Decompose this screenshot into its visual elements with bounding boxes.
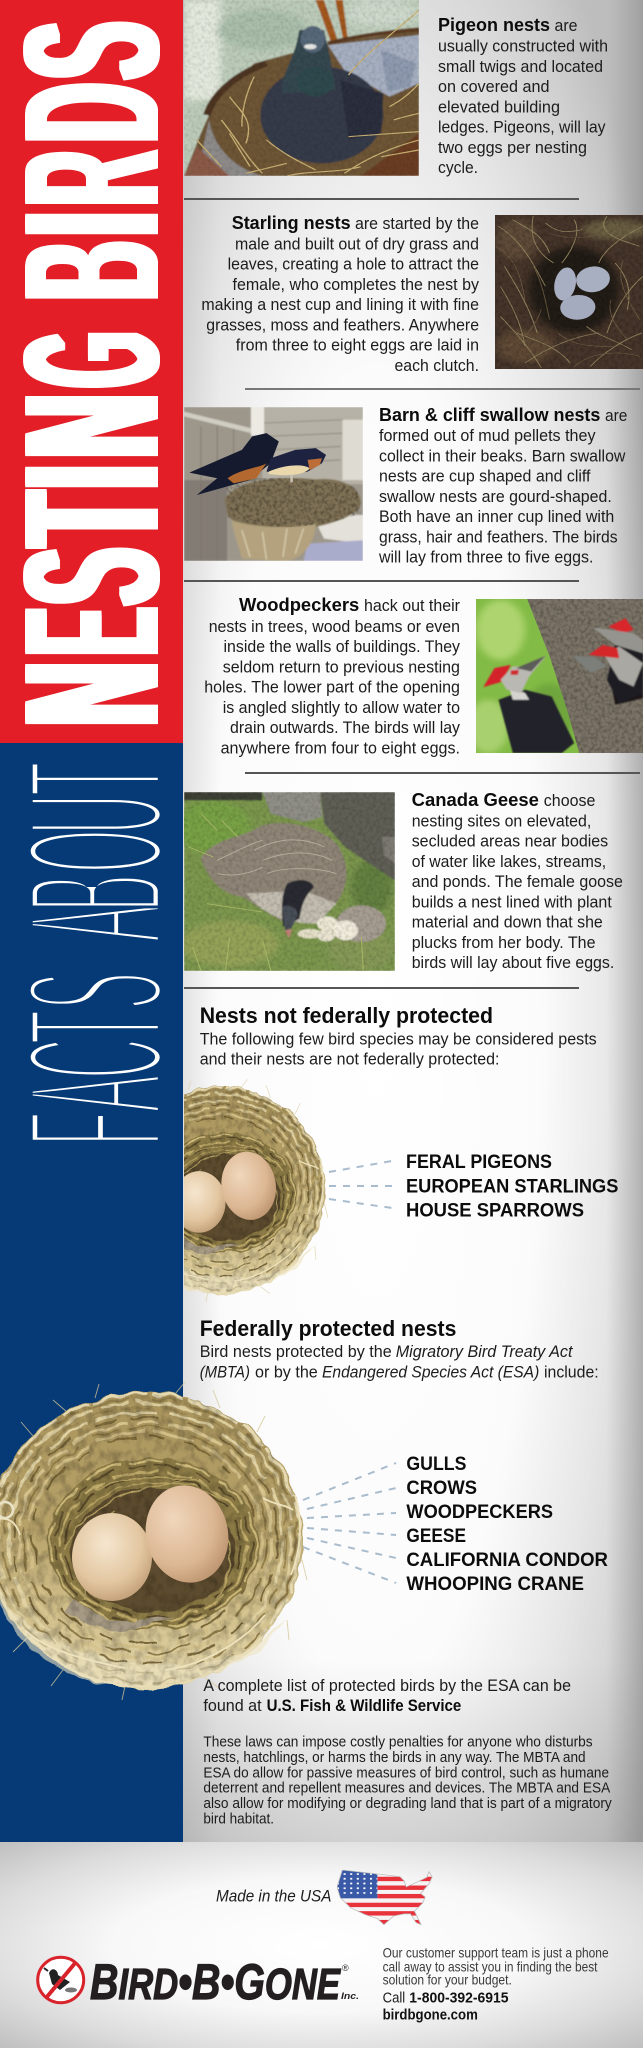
text block: woodpeckers: is angled slightly to allow water to — [223, 699, 460, 717]
text block: barn and cliff swallow nests: Both have an inner cup lined with — [379, 508, 614, 526]
illustration: small nest with two eggs — [184, 1079, 328, 1302]
text block: penalties paragraph: nests, hatchlings, or harms the birds in any way. The MBTA and — [203, 1750, 586, 1766]
text block: protected intro: or by the — [255, 1364, 318, 1382]
text block: pigeon nests: cycle. — [438, 159, 478, 177]
panel: red title band — [0, 0, 183, 743]
text block: pigeon nests: small twigs and located — [438, 58, 603, 76]
text: Made in the USA: Made in the USA — [216, 1887, 331, 1906]
list: unprotected species — [406, 1151, 618, 1222]
text block: pigeon nests: are — [554, 17, 578, 35]
list: protected species: GULLS — [406, 1453, 466, 1475]
text block: Canada geese: nesting sites on elevated, — [412, 812, 591, 830]
logo wordmark: BIRD•B•GONE — [90, 1954, 341, 2010]
registered mark: ® — [342, 1963, 349, 1973]
text block: pigeon nests — [438, 15, 608, 177]
text block: ESA list reference: A complete list of protected birds by the ESA can be — [203, 1677, 571, 1695]
text block: penalties paragraph: These laws can impose costly penalties for anyone who disturbs — [203, 1735, 593, 1751]
text block: pigeon nests: usually constructed with — [438, 38, 608, 56]
list: protected species: WOODPECKERS — [406, 1501, 553, 1523]
text block: pigeon nests: on covered and — [438, 78, 550, 96]
text block: pigeon nests: elevated building — [438, 98, 560, 116]
logo suffix: Inc. — [341, 1991, 359, 2001]
list: protected species: CALIFORNIA CONDOR — [406, 1549, 608, 1571]
text block: Canada geese: secluded areas near bodies — [412, 832, 608, 850]
text block: protected intro: Endangered Species Act (ESA) — [322, 1364, 539, 1382]
text block: barn and cliff swallow nests: will lay from three to five eggs. — [378, 548, 593, 566]
list: protected species: WHOOPING CRANE — [406, 1573, 584, 1595]
text block: barn and cliff swallow nests — [378, 405, 627, 566]
text block: Canada geese: plucks from her body. The — [412, 934, 596, 952]
text block: unprotected intro: The following few bird species may be considered pests — [200, 1030, 597, 1048]
dashed connectors: unprotected species — [329, 1161, 392, 1208]
text block: penalties paragraph: ESA do allow for passive measures of bird control, such as humane — [203, 1765, 609, 1781]
text block: woodpeckers: Woodpeckers — [239, 595, 359, 615]
text block: starling nests: Starling nests — [232, 213, 351, 233]
list: protected species: GEESE — [406, 1525, 466, 1547]
text block: starling nests: grasses, moss and feathers. Anywhere — [206, 316, 479, 334]
text block: customer support contact: call away to assist you in finding the best — [383, 1958, 598, 1974]
text block: barn and cliff swallow nests: formed out of mud pellets they — [379, 427, 596, 445]
text block: starling nests: each clutch. — [394, 357, 479, 375]
text block: Canada geese: birds will lay about five eggs. — [412, 954, 614, 972]
text block: starling nests: are started by the — [355, 215, 479, 233]
text block: barn and cliff swallow nests: nests are cup shaped and cliff — [379, 468, 591, 486]
list: unprotected species: EUROPEAN STARLINGS — [406, 1176, 618, 1198]
text block: Canada geese: choose — [544, 792, 595, 810]
text block: starling nests — [201, 213, 480, 375]
text block: pigeon nests: ledges. Pigeons, will lay — [438, 118, 606, 136]
text block: Canada geese: of water like lakes, streams, — [412, 853, 606, 871]
text block: starling nests: from three to eight eggs are laid in — [236, 336, 479, 354]
list: protected species — [406, 1453, 608, 1595]
text block: unprotected intro: and their nests are not federally protected: — [200, 1050, 499, 1068]
text block: Canada geese: builds a nest lined with plant — [412, 894, 612, 912]
text block: protected intro: include: — [544, 1364, 599, 1382]
text block: ESA list reference: found at — [203, 1697, 262, 1715]
text block: customer support contact: birdbgone.com — [383, 2006, 478, 2023]
text block: woodpeckers: drain outwards. The birds will lay — [230, 719, 461, 737]
list: unprotected species: HOUSE SPARROWS — [406, 1200, 584, 1222]
heading: federally protected nests: Federally protected nests — [200, 1316, 456, 1341]
text block: starling nests: male and built out of dry grass and — [235, 236, 479, 254]
text block: barn and cliff swallow nests: Barn & cliff swallow nests — [379, 405, 600, 425]
text block: woodpeckers — [204, 595, 461, 758]
text block: protected intro — [200, 1343, 599, 1382]
logo: Bird-B-Gone — [38, 1954, 359, 2010]
text block: starling nests: making a nest cup and lining it with fine — [201, 296, 479, 314]
text block: customer support contact: 1-800-392-6915 — [409, 1990, 508, 2007]
photo: pileated woodpeckers at tree — [476, 599, 643, 753]
heading: NESTING BIRDS — [0, 22, 199, 730]
text block: woodpeckers: hack out their — [364, 597, 460, 615]
text block: protected intro: (MBTA) — [200, 1364, 250, 1382]
text block: woodpeckers: seldom return to previous nesting — [223, 658, 460, 676]
text block: pigeon nests: two eggs per nesting — [438, 139, 587, 157]
text block: Canada geese: and ponds. The female goose — [412, 873, 623, 891]
text block: starling nests: leaves, creating a hole to attract the — [228, 256, 479, 274]
photo: starling nest with eggs — [495, 215, 643, 369]
text block: barn and cliff swallow nests: swallow nests are gourd-shaped. — [379, 488, 612, 506]
text block: penalties paragraph: deterrent and repellent measures and devices. The MBTA and ESA — [203, 1781, 611, 1797]
list: unprotected species: FERAL PIGEONS — [406, 1151, 552, 1173]
text block: ESA list reference: U.S. Fish & Wildlife Service — [267, 1697, 461, 1715]
text block: customer support contact: Our customer support team is just a phone — [383, 1945, 609, 1961]
text block: woodpeckers: nests in trees, wood beams or even — [209, 618, 460, 636]
panel: blue title band — [0, 743, 183, 1842]
text block: customer support contact: solution for your budget. — [383, 1972, 512, 1988]
icon: no-bird symbol — [38, 1957, 84, 2003]
text block: woodpeckers: inside the walls of buildings. They — [224, 638, 461, 656]
photo: Canada goose on nest — [184, 792, 395, 971]
text block: penalties paragraph — [203, 1735, 613, 1827]
text block: protected intro: Migratory Bird Treaty Act — [396, 1343, 574, 1361]
photo: barn swallows at mud nest — [184, 407, 363, 561]
illustration: large nest with two eggs — [0, 1382, 307, 1700]
background: main panel — [183, 0, 643, 1842]
text block: penalties paragraph: also allow for modifying or degrading land that is part of a migratory — [203, 1796, 613, 1812]
text block: woodpeckers: anywhere from four to eight eggs. — [221, 740, 460, 758]
text block: Canada geese: material and down that she — [412, 914, 603, 932]
photo: pigeon on nest — [184, 0, 419, 176]
background: footer panel — [0, 1842, 643, 2048]
text block: customer support contact: Call — [383, 1990, 405, 2007]
text block: Canada geese: Canada Geese — [412, 790, 539, 810]
text block: barn and cliff swallow nests: are — [605, 407, 627, 425]
text block: barn and cliff swallow nests: grass, hair and feathers. The birds — [379, 528, 618, 546]
text block: Canada geese — [412, 790, 623, 972]
text block: protected intro: Bird nests protected by the — [200, 1343, 392, 1361]
text block: starling nests: female, who completes the nest by — [232, 276, 480, 294]
text block: customer support contact — [383, 1945, 609, 2023]
text block: woodpeckers: holes. The lower part of the opening — [204, 678, 460, 696]
list: protected species: CROWS — [406, 1477, 477, 1499]
dashed connectors: protected species — [303, 1463, 396, 1583]
text block: unprotected intro — [200, 1030, 597, 1068]
icon: USA flag map — [337, 1870, 432, 1925]
text block: ESA list reference — [203, 1677, 571, 1715]
text block: penalties paragraph: bird habitat. — [203, 1811, 274, 1827]
heading: nests not federally protected: Nests not federally protected — [200, 1003, 493, 1028]
text block: pigeon nests: Pigeon nests — [438, 15, 550, 35]
text block: barn and cliff swallow nests: collect in their beaks. Barn swallow — [379, 448, 625, 466]
